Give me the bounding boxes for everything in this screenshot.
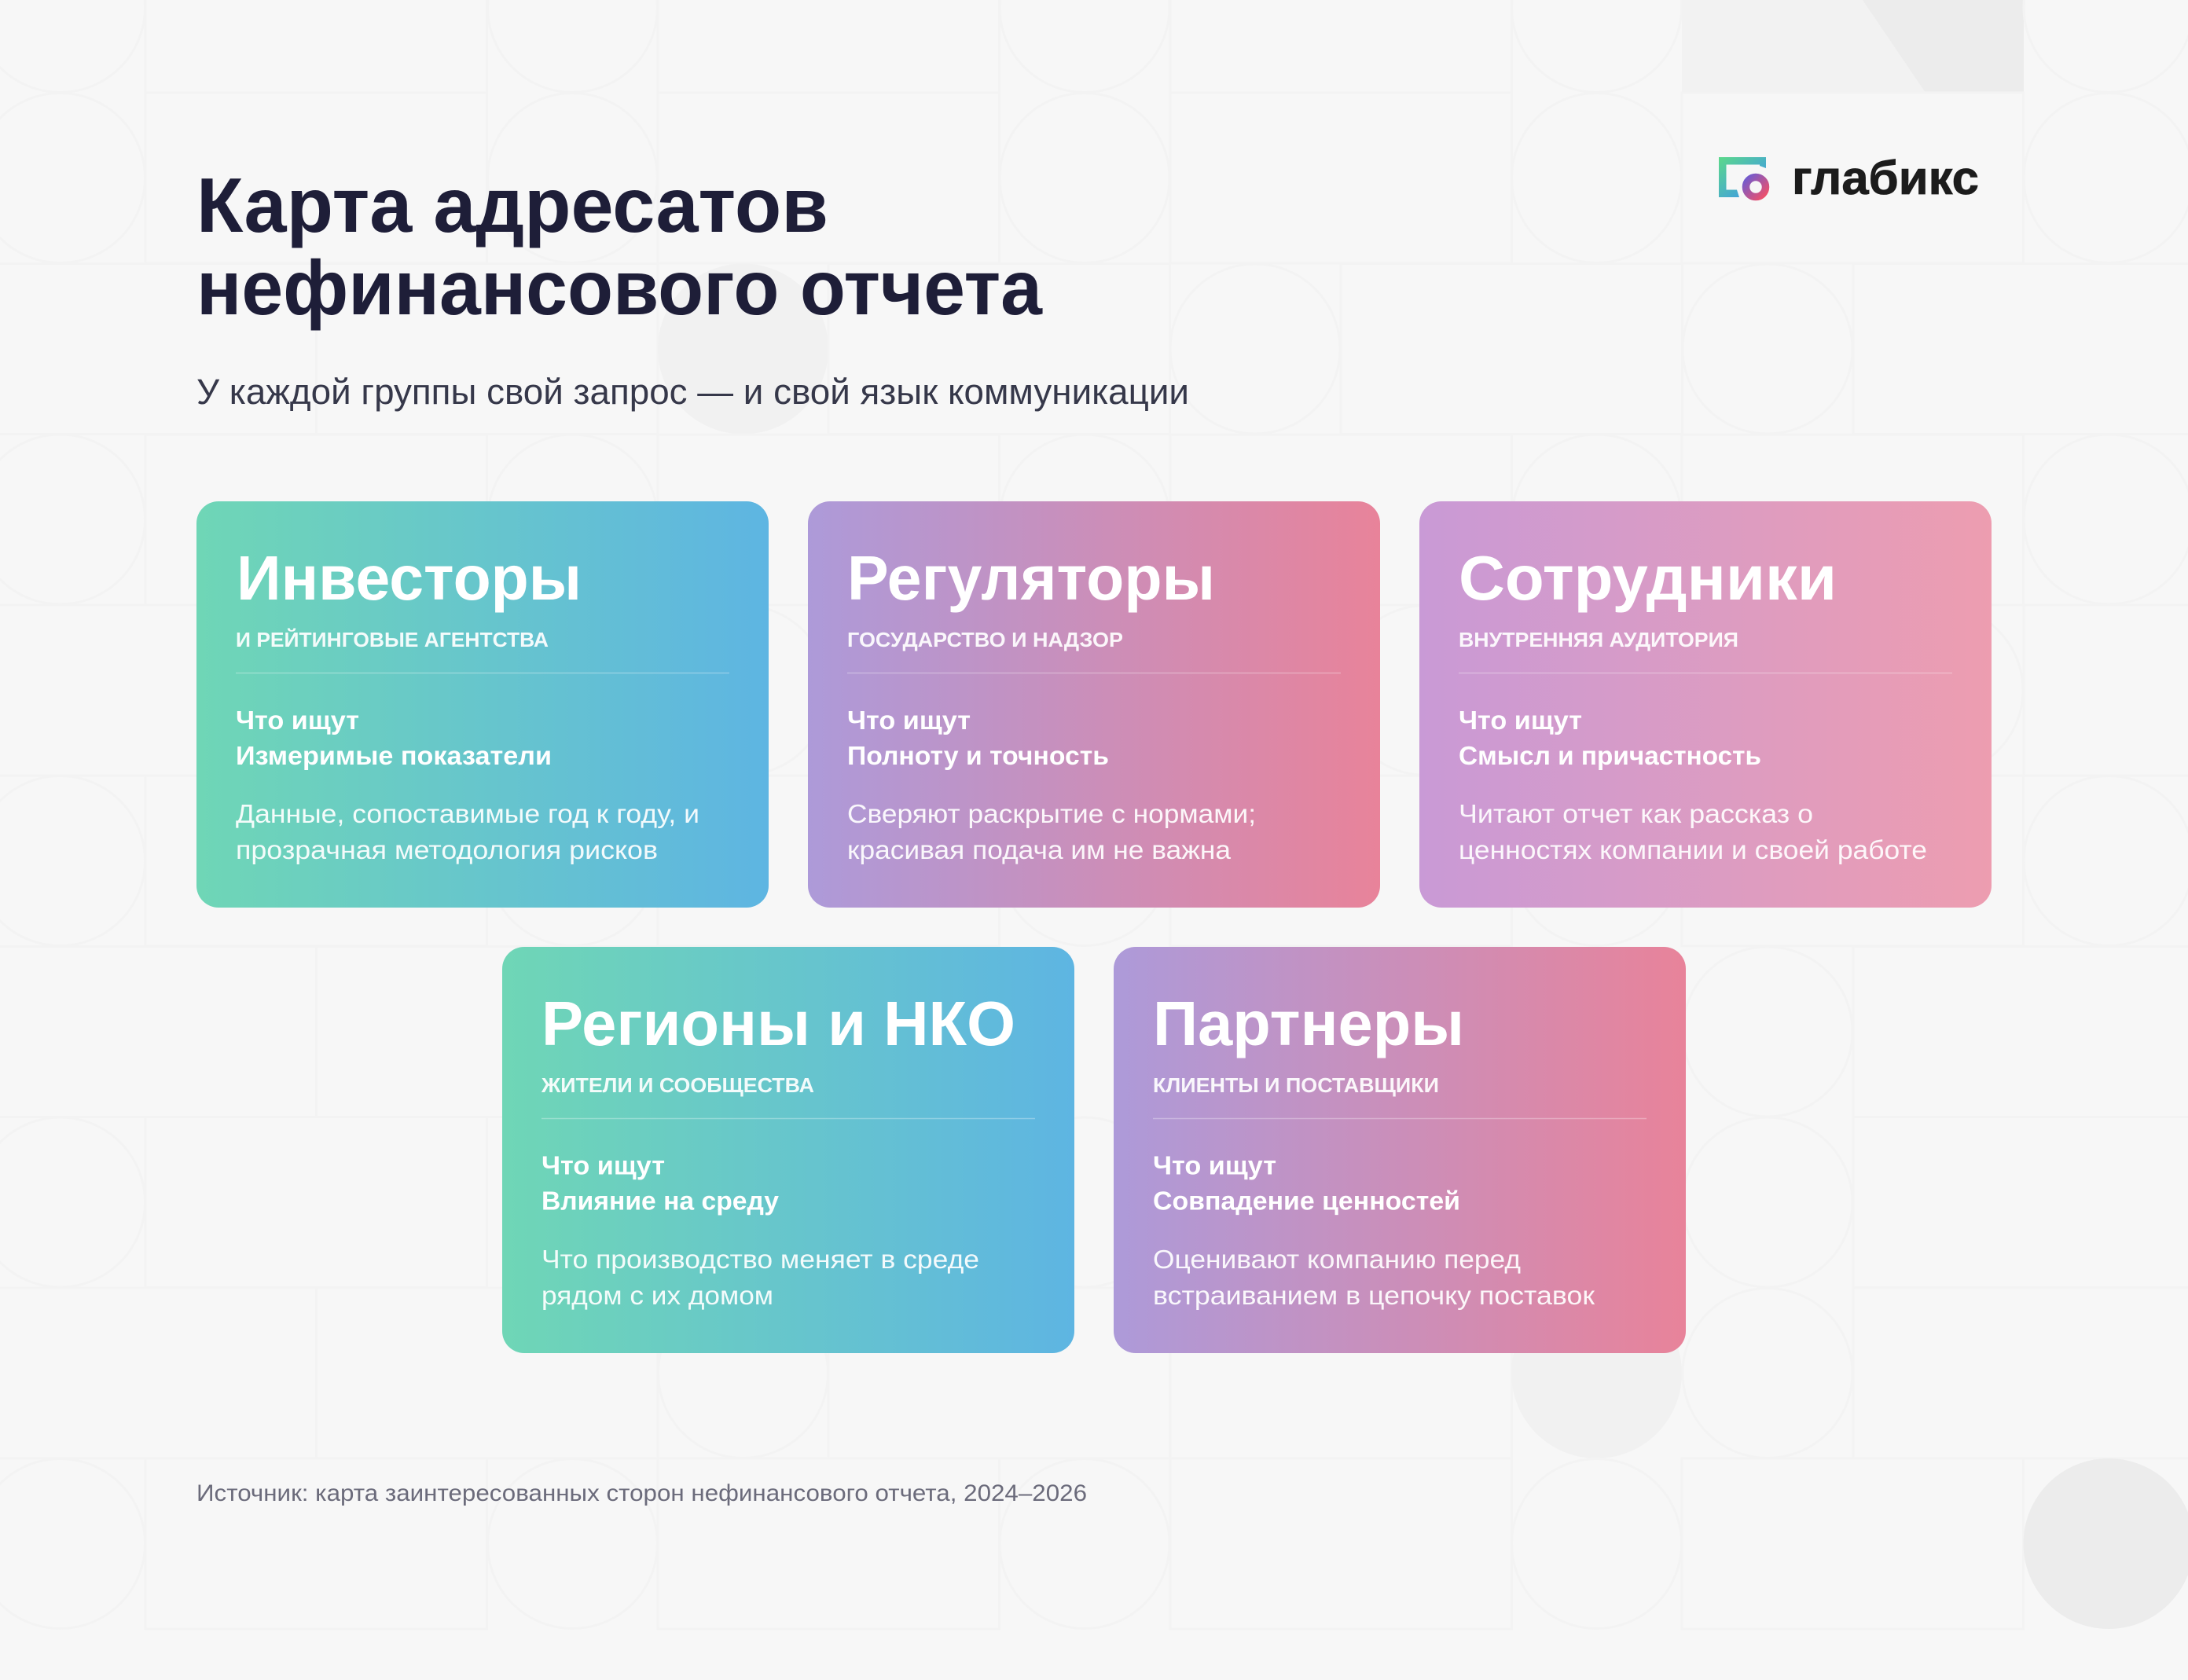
r1 xyxy=(0,93,145,262)
what they seek: Что ищут xyxy=(541,1150,665,1180)
what they seek: Совпадение ценностей xyxy=(1153,1187,1460,1215)
what they seek xyxy=(541,1150,780,1215)
r9 xyxy=(0,1458,145,1628)
card heading: Регионы и НКО xyxy=(541,989,1015,1058)
description: Данные, сопоставимые год к году, и xyxy=(236,799,699,828)
description: Читают отчет как рассказ о xyxy=(1459,799,1813,828)
description: Оценивают компанию перед xyxy=(1153,1245,1521,1274)
description xyxy=(541,1245,979,1310)
card heading: Регуляторы xyxy=(847,543,1215,613)
what they seek: Что ищут xyxy=(847,706,971,735)
r5 xyxy=(0,776,145,946)
card subheading: КЛИЕНТЫ И ПОСТАВЩИКИ xyxy=(1153,1073,1439,1097)
card subheading: И РЕЙТИНГОВЫЕ АГЕНТСТВА xyxy=(236,628,549,651)
description: красивая подача им не важна xyxy=(847,835,1232,864)
description: Что производство меняет в среде xyxy=(541,1245,979,1274)
card heading: Партнеры xyxy=(1153,989,1464,1058)
title: нефинансового отчета xyxy=(196,244,1043,331)
what they seek xyxy=(847,706,1109,770)
card subheading: ГОСУДАРСТВО И НАДЗОР xyxy=(847,628,1123,651)
what they seek: Полноту и точность xyxy=(847,741,1109,770)
r2 xyxy=(0,264,316,434)
what they seek xyxy=(1459,706,1761,770)
r7 xyxy=(0,1117,145,1287)
subtitle: У каждой группы свой запрос — и свой язык коммуникации xyxy=(196,372,1189,412)
what they seek: Смысл и причастность xyxy=(1459,741,1761,770)
what they seek xyxy=(1153,1150,1460,1215)
r4 xyxy=(0,605,316,776)
r0 xyxy=(0,0,145,93)
r8 xyxy=(0,1288,316,1458)
description xyxy=(847,799,1256,864)
logo wordmark: глабикс xyxy=(1792,152,1979,204)
panel: Партнеры xyxy=(1114,947,1686,1353)
description: прозрачная методология рисков xyxy=(236,835,658,864)
description xyxy=(1153,1245,1595,1310)
description xyxy=(1459,799,1927,864)
title: Карта адресатов xyxy=(196,162,828,248)
what they seek: Измеримые показатели xyxy=(236,741,552,770)
panel: Сотрудники xyxy=(1419,501,1992,908)
panel: Инвесторы xyxy=(196,501,769,908)
icon: logo mark xyxy=(1719,157,1766,197)
panel: Регуляторы xyxy=(808,501,1380,908)
what they seek: Что ищут xyxy=(236,706,359,735)
card subheading: ВНУТРЕННЯЯ АУДИТОРИЯ xyxy=(1459,628,1738,651)
card heading: Инвесторы xyxy=(237,543,582,613)
card subheading: ЖИТЕЛИ И СООБЩЕСТВА xyxy=(541,1073,814,1097)
description xyxy=(236,799,699,864)
source note: Источник: карта заинтересованных сторон нефинансового отчета, 2024–2026 xyxy=(196,1480,1087,1506)
card heading: Сотрудники xyxy=(1459,543,1837,613)
what they seek: Что ищут xyxy=(1459,706,1582,735)
what they seek: Влияние на среду xyxy=(541,1187,780,1215)
description: встраиванием в цепочку поставок xyxy=(1153,1281,1595,1310)
r3 xyxy=(0,435,145,604)
what they seek: Что ищут xyxy=(1153,1150,1276,1180)
panel: Регионы и НКО xyxy=(502,947,1074,1353)
logo: глабикс xyxy=(1719,152,1979,204)
description: рядом с их домом xyxy=(541,1281,773,1310)
what they seek xyxy=(236,706,552,770)
title xyxy=(196,162,1043,331)
description: ценностях компании и своей работе xyxy=(1459,835,1927,864)
description: Сверяют раскрытие с нормами; xyxy=(847,799,1256,828)
r6 xyxy=(0,946,316,1117)
